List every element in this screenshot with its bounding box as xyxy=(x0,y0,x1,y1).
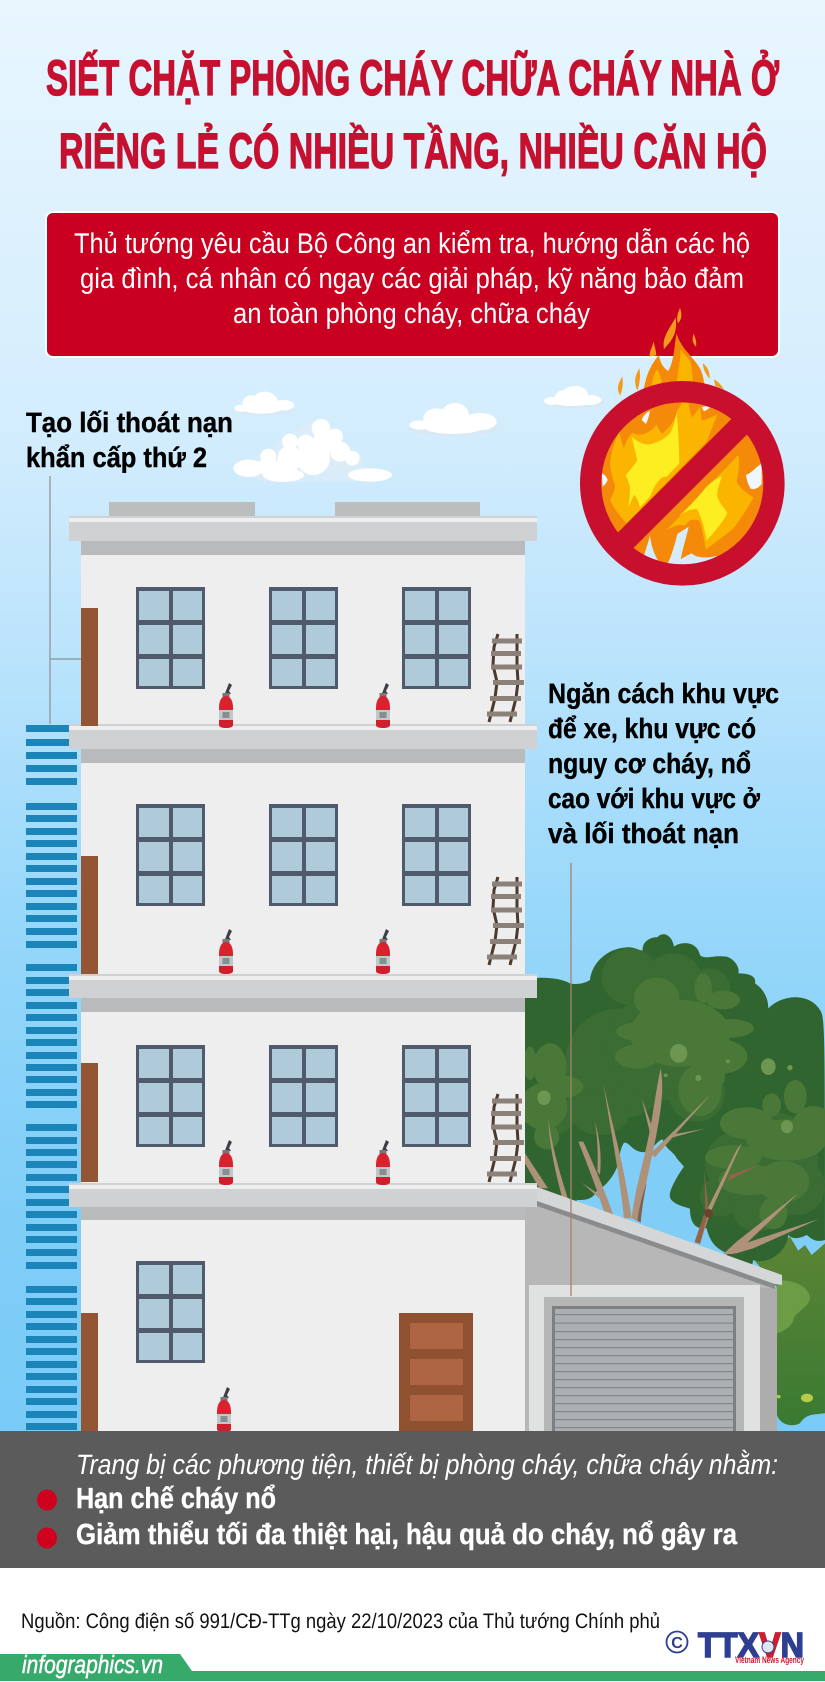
logo: TTXVN: TTXVN xyxy=(698,1626,804,1665)
label: second emergency exit: Tạo lối thoát nạn xyxy=(26,407,233,438)
label: separation of areas xyxy=(548,678,779,849)
inner flames xyxy=(601,402,764,564)
garage xyxy=(525,1187,782,1431)
windows xyxy=(136,587,205,689)
floor ledges xyxy=(81,749,525,763)
label: second emergency exit xyxy=(26,407,233,473)
building xyxy=(69,502,537,1431)
white footer background xyxy=(0,1568,825,1682)
sky gap in the foliage xyxy=(577,1139,727,1273)
roof blocks xyxy=(109,502,255,516)
outer flames xyxy=(618,308,724,396)
label: separation of areas: để xe, khu vực có xyxy=(548,713,756,744)
label: separation of areas: cao với khu vực ở xyxy=(548,783,760,814)
label: separation of areas: và lối thoát nạn xyxy=(548,818,739,849)
emergency escape stairs xyxy=(26,725,77,1430)
cloud 2 xyxy=(542,386,604,408)
footer band: infographics.vn xyxy=(0,1651,825,1681)
red summary box: Thủ tướng yêu cầu Bộ Công an kiểm tra, hướng dẫn các hộ xyxy=(74,228,750,260)
branches xyxy=(525,1068,819,1254)
red summary box xyxy=(46,212,779,357)
red summary box: gia đình, cá nhân có ngay các giải pháp, kỹ năng bảo đảm xyxy=(80,263,744,295)
icon: no fire sign xyxy=(591,308,774,575)
main tree xyxy=(519,934,825,1273)
right background tree xyxy=(750,1237,825,1425)
roof slab xyxy=(69,516,537,541)
leader line: garage xyxy=(570,863,572,1296)
label: separation of areas: Ngăn cách khu vực xyxy=(548,678,779,709)
rope ladders xyxy=(487,634,524,1182)
brown side doors xyxy=(81,608,98,726)
clouds xyxy=(233,392,498,482)
logo: TTXVN: C xyxy=(671,1635,683,1652)
label: second emergency exit: khẩn cấp thứ 2 xyxy=(26,442,207,473)
bullet 2: Giảm thiểu tối đa thiệt hại, hậu quả do cháy, nổ gây ra xyxy=(76,1519,738,1551)
leader line: escape route xyxy=(50,476,81,724)
cloud 4 xyxy=(233,419,392,482)
red summary box: an toàn phòng cháy, chữa cháy xyxy=(233,298,591,330)
wall xyxy=(81,540,525,1431)
front door xyxy=(399,1313,473,1431)
panel: equipment band xyxy=(0,1431,825,1568)
fire extinguishers xyxy=(217,683,390,1432)
title xyxy=(46,50,779,179)
bullet 1: Hạn chế cháy nổ xyxy=(76,1483,276,1515)
source note: Nguồn: Công điện số 991/CĐ-TTg ngày 22/10/2023 của Thủ tướng Chính phủ xyxy=(21,1610,660,1633)
cloud 1 xyxy=(233,392,294,415)
label: separation of areas: nguy cơ cháy, nổ xyxy=(548,748,751,779)
footer band: infographics.vn: infographics.vn xyxy=(22,1651,163,1679)
cloud 3 xyxy=(408,403,498,436)
